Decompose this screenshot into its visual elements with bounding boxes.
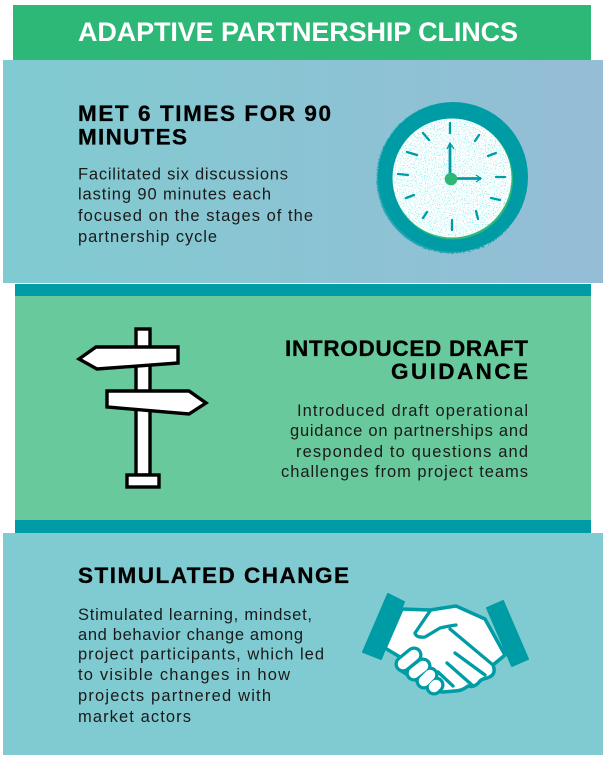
hand inner lines bbox=[415, 611, 493, 686]
icon: handshake bbox=[363, 594, 528, 692]
text: draft operational guidance: Introduced draft operational bbox=[297, 402, 528, 420]
heading: met 6 times: MET 6 TIMES FOR 90 bbox=[78, 101, 331, 126]
heading: stimulated change: STIMULATED CHANGE bbox=[78, 563, 349, 588]
text: learning and behavior change: and behavior change among bbox=[78, 626, 303, 644]
heading: introduced draft guidance: INTRODUCED DRAFT bbox=[285, 336, 528, 361]
text: learning and behavior change: project participants, which led bbox=[78, 646, 324, 664]
text: six discussions: lasting 90 minutes each bbox=[78, 186, 271, 204]
heading: met 6 times: MINUTES bbox=[78, 124, 187, 150]
divider band bbox=[15, 284, 591, 296]
header banner bbox=[13, 5, 591, 61]
divider band bbox=[15, 520, 591, 533]
cuffs bbox=[363, 594, 404, 659]
text: learning and behavior change: Stimulated learning, mindset, bbox=[78, 606, 312, 624]
text: six discussions: Facilitated six discussions bbox=[78, 166, 288, 184]
panel: stimulated change bbox=[3, 533, 603, 755]
text: six discussions: partnership cycle bbox=[78, 228, 217, 246]
fingers bbox=[403, 655, 436, 687]
panel: draft guidance bbox=[15, 296, 591, 520]
hand silhouette bbox=[385, 606, 505, 692]
text: draft operational guidance: challenges from project teams bbox=[281, 463, 528, 481]
heading: introduced draft guidance bbox=[285, 336, 528, 384]
text: draft operational guidance: responded to questions and bbox=[296, 443, 528, 461]
icon: signpost bbox=[79, 329, 206, 487]
icon: clock bbox=[376, 102, 528, 254]
panel: met 6 times bbox=[3, 60, 603, 283]
text: learning and behavior change: to visible changes in how bbox=[78, 666, 290, 684]
text: learning and behavior change: projects partnered with bbox=[78, 687, 271, 705]
text: draft operational guidance bbox=[281, 402, 528, 481]
heading: met 6 times bbox=[78, 101, 331, 150]
title: ADAPTIVE PARTNERSHIP CLINCS bbox=[78, 17, 518, 47]
text: draft operational guidance: guidance on partnerships and bbox=[290, 422, 528, 440]
text: six discussions bbox=[78, 166, 313, 246]
text: learning and behavior change bbox=[78, 606, 324, 726]
text: six discussions: focused on the stages of the bbox=[78, 207, 313, 225]
text: learning and behavior change: market actors bbox=[78, 708, 191, 726]
heading: introduced draft guidance: GUIDANCE bbox=[391, 359, 528, 384]
